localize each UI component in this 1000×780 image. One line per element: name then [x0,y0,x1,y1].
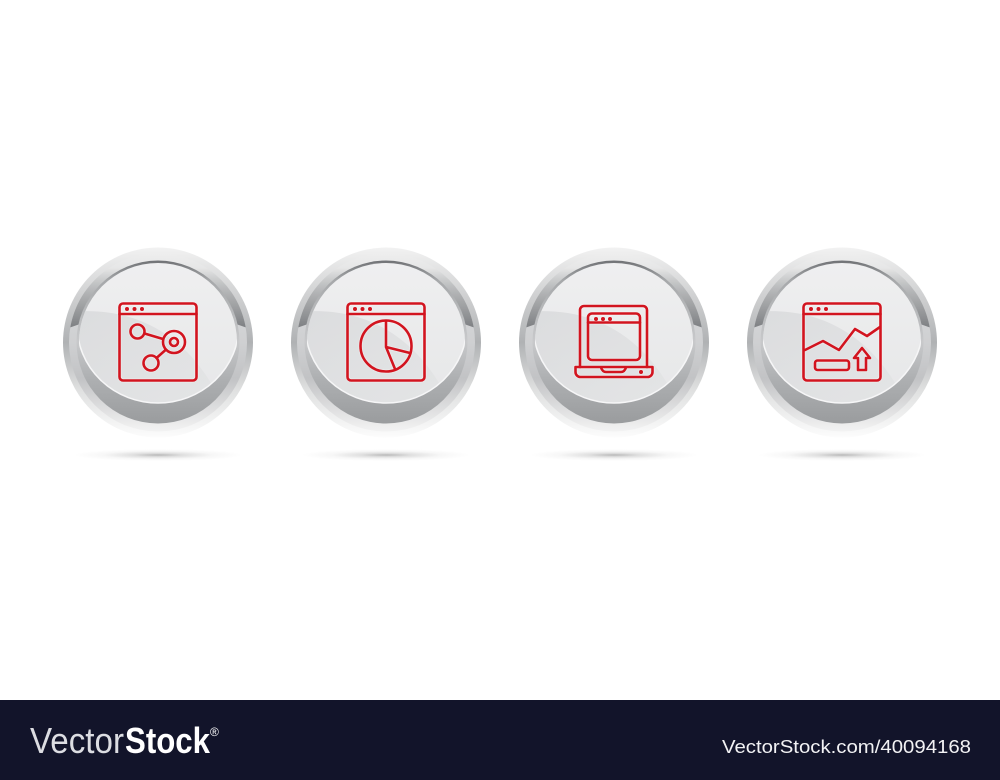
button shadow 4 [758,449,926,461]
icon: browser window with share nodes [120,304,196,380]
footer logo [30,720,219,761]
footer bar [0,700,1000,780]
footer logo: ® [210,725,219,739]
icon: browser window with growth chart and up arrow [804,304,880,380]
silver button 4 [744,247,940,438]
footer logo: Stock [125,720,211,761]
icon: browser window with pie chart [348,304,424,380]
footer image id: VectorStock.com/40094168 [722,736,971,757]
button shadow 1 [74,449,242,461]
silver button 3 [516,247,712,438]
silver button 1 [60,247,256,438]
button shadow 3 [530,449,698,461]
footer logo: Vector [30,720,124,761]
silver button 2 [288,247,484,438]
icon: laptop with browser window [576,306,652,377]
button shadow 2 [302,449,470,461]
